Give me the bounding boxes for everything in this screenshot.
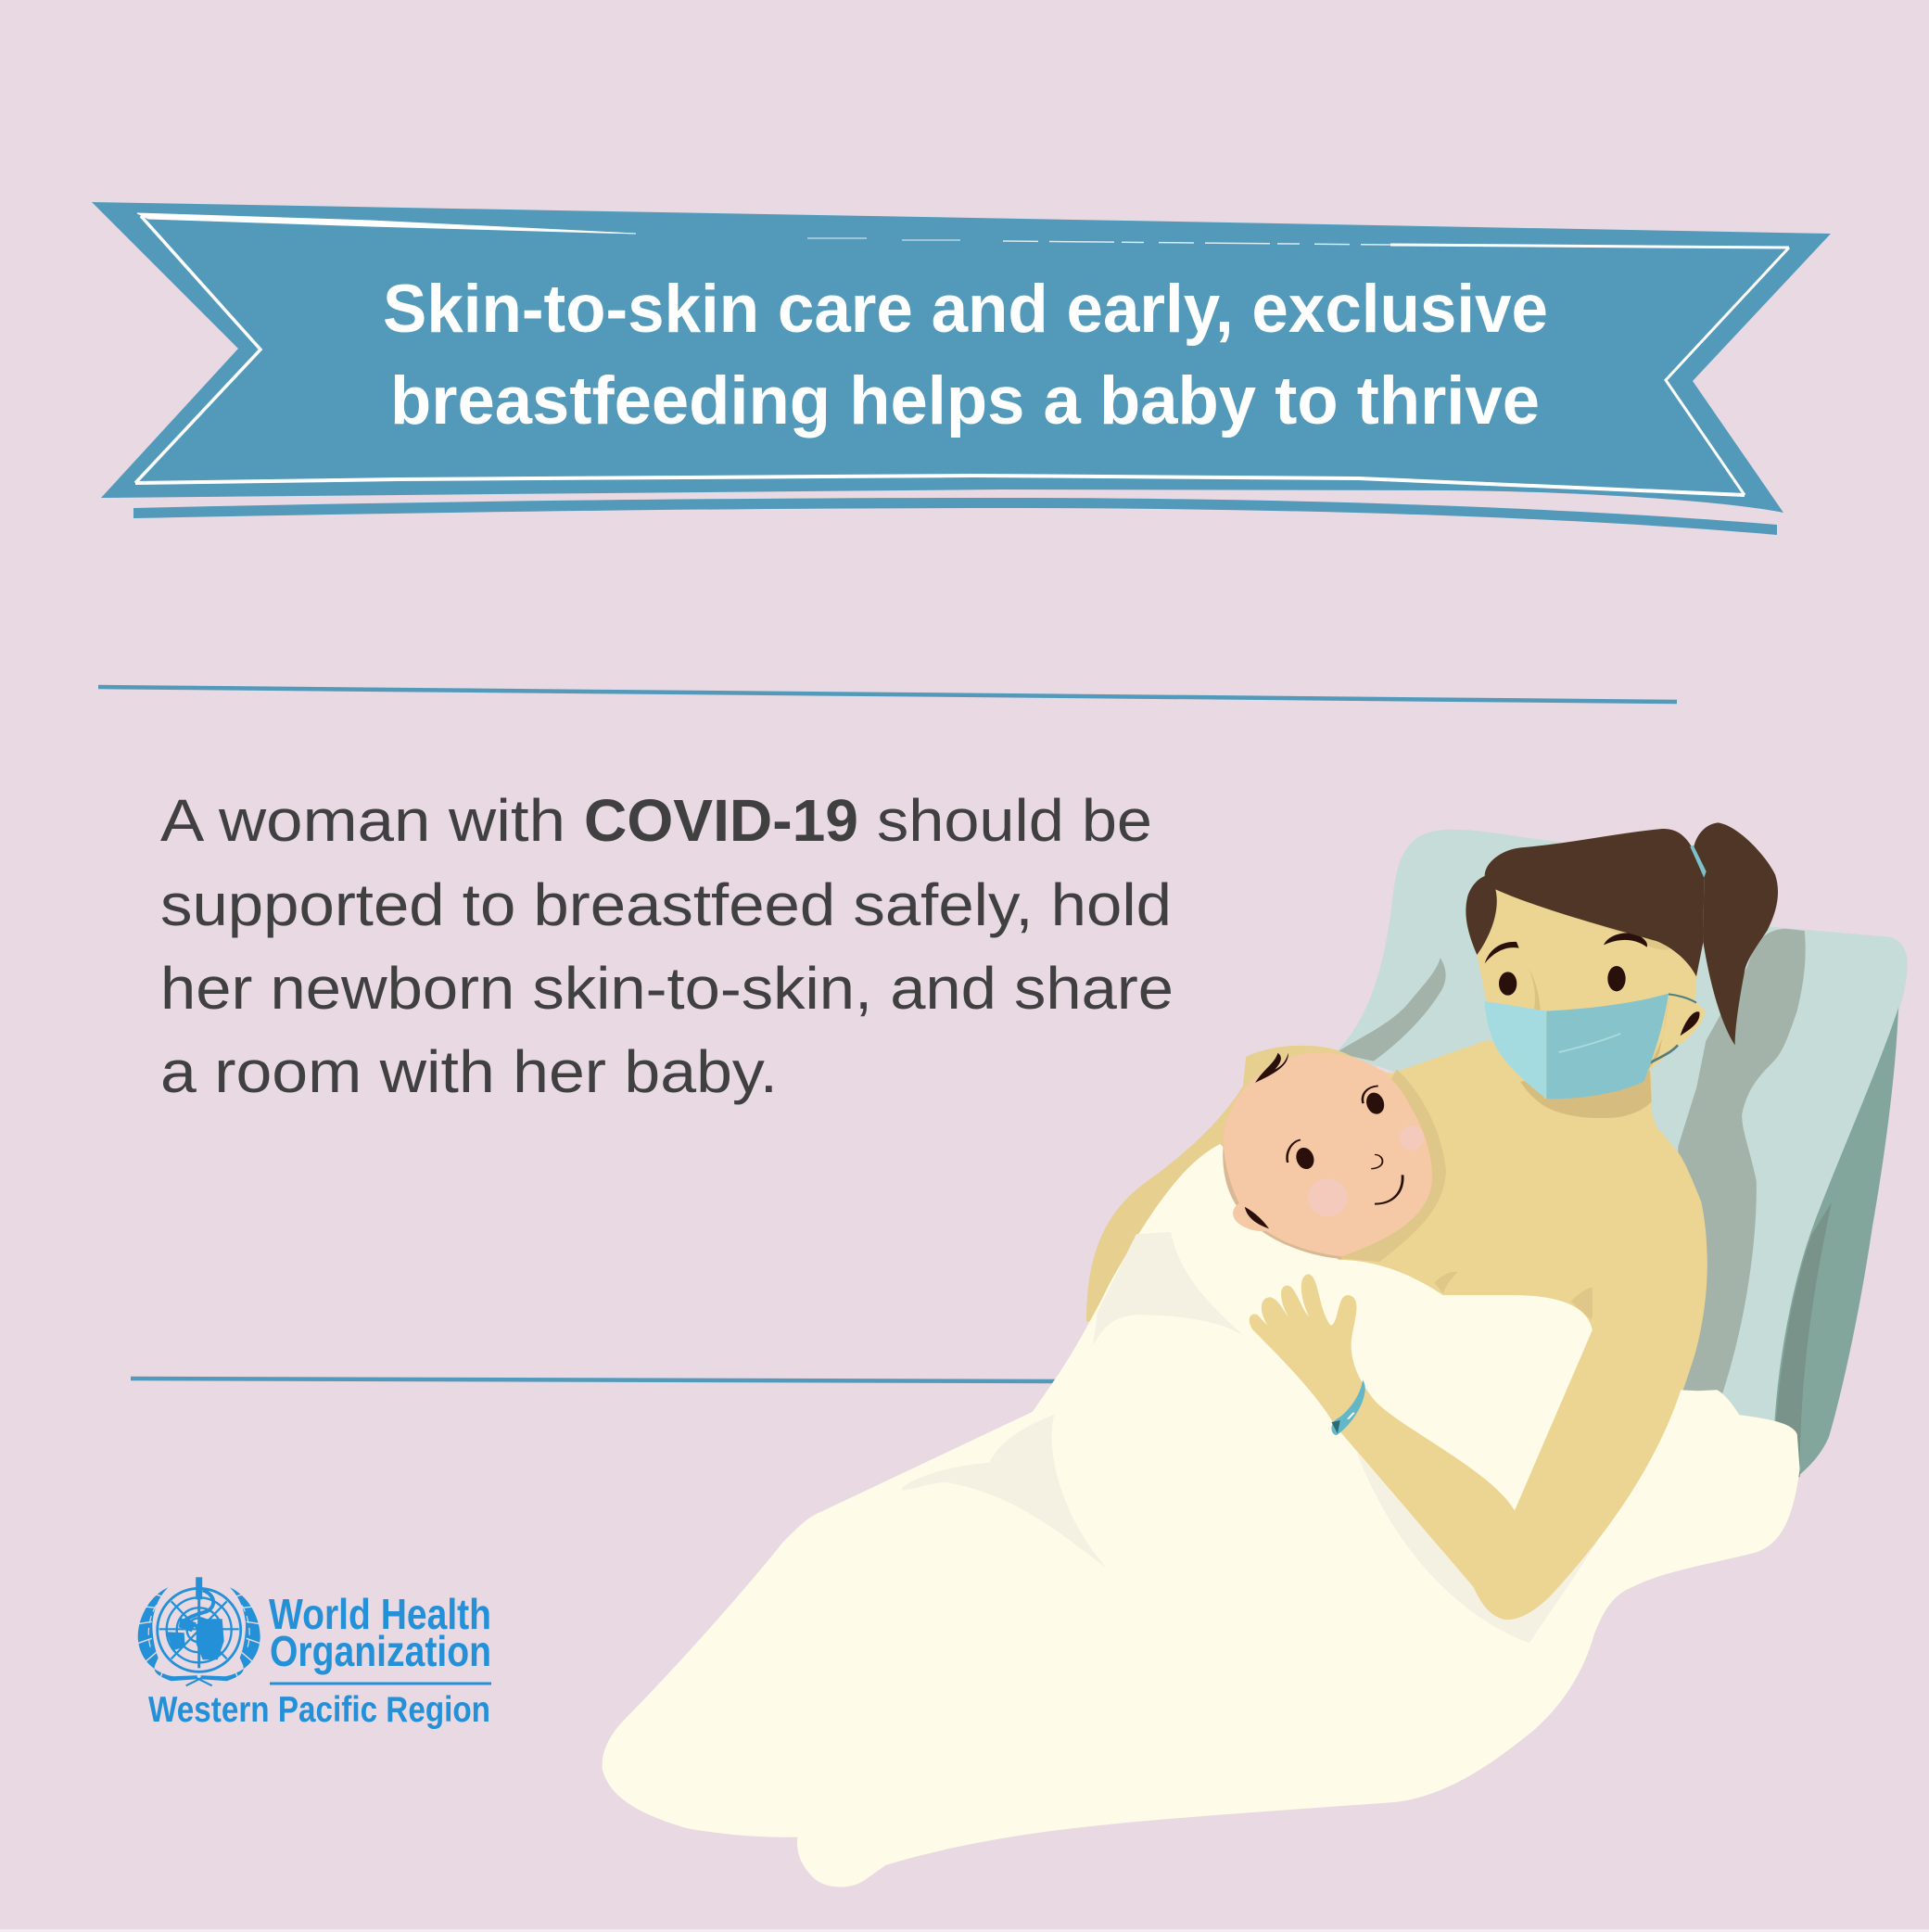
ear inner <box>1681 1011 1699 1036</box>
mother forearm and hand <box>1250 1243 1707 1620</box>
neck shadow <box>1520 1069 1652 1118</box>
eyebrows <box>1485 933 1647 963</box>
WHO wordmark: Western Pacific Region <box>148 1690 490 1730</box>
body text: a room with her baby. <box>160 1038 778 1105</box>
bottom divider line <box>131 1379 1061 1381</box>
banner title <box>383 272 1548 439</box>
baby head shadow <box>1223 1139 1344 1259</box>
breast shading <box>1434 1272 1594 1320</box>
hair <box>1466 829 1704 976</box>
pillow shadow stripe <box>1678 929 1806 1396</box>
globe <box>158 1588 241 1671</box>
baby nose <box>1371 1155 1382 1169</box>
WHO wordmark: Organization <box>270 1627 491 1675</box>
laurel stems <box>186 1676 212 1685</box>
laurel right <box>201 1587 264 1681</box>
banner white brush outline <box>135 213 1789 495</box>
illustration: mother holding newborn <box>603 822 1908 1887</box>
nose shading <box>1528 967 1541 1010</box>
banner under-stripe <box>133 498 1777 535</box>
baby <box>1223 1053 1432 1259</box>
hair tie <box>1690 845 1707 878</box>
pillow darker strip <box>1772 1201 1832 1477</box>
banner ribbon shape <box>92 202 1831 513</box>
baby hair <box>1255 1053 1288 1083</box>
staff <box>196 1577 202 1599</box>
body text: should be <box>877 787 1152 854</box>
body text: supported to breastfeed safely, hold <box>160 871 1172 938</box>
WHO wordmark: World Health <box>269 1590 491 1638</box>
body text: her newborn skin-to-skin, and share <box>160 955 1174 1022</box>
serpent <box>184 1590 213 1633</box>
fringe shadow <box>1594 922 1669 950</box>
mask straps <box>1669 994 1696 1003</box>
mother head <box>1466 822 1778 1118</box>
banner title: Skin-to-skin care and early, exclusive <box>383 272 1548 347</box>
banner title: breastfeeding helps a baby to thrive <box>390 363 1540 439</box>
ponytail <box>1694 822 1778 1045</box>
blanket <box>603 1144 1800 1887</box>
blanket fold under arm <box>1356 1395 1672 1644</box>
WHO emblem <box>134 1577 264 1685</box>
mask shadow on cheek <box>1647 997 1669 1073</box>
mother torso and rear arm <box>1086 1040 1707 1437</box>
baby head torso shadow <box>1333 1070 1446 1262</box>
WHO wordmark <box>148 1590 491 1730</box>
blanket fold upper <box>1093 1232 1244 1345</box>
eyes <box>1499 972 1517 996</box>
left pillow fold shadow <box>1336 958 1446 1061</box>
bracelet <box>1331 1380 1365 1435</box>
top divider line <box>98 687 1677 702</box>
body text: COVID-19 <box>584 787 858 854</box>
WHO logo <box>134 1577 491 1730</box>
body text: A woman with <box>160 787 565 854</box>
mask <box>1485 1001 1546 1099</box>
face <box>1477 878 1705 1099</box>
baby head <box>1224 1053 1432 1256</box>
baby smile <box>1375 1175 1402 1204</box>
blanket fold lower <box>901 1415 1106 1567</box>
baby cheeks <box>1308 1178 1348 1216</box>
continents <box>167 1618 224 1659</box>
laurel left <box>134 1587 197 1681</box>
pillow dark edge <box>1745 1008 1898 1477</box>
baby eyes <box>1364 1092 1386 1115</box>
pillows <box>1336 830 1908 1477</box>
banner <box>92 202 1831 535</box>
body text <box>160 787 1174 1105</box>
baby ear <box>1233 1201 1269 1231</box>
